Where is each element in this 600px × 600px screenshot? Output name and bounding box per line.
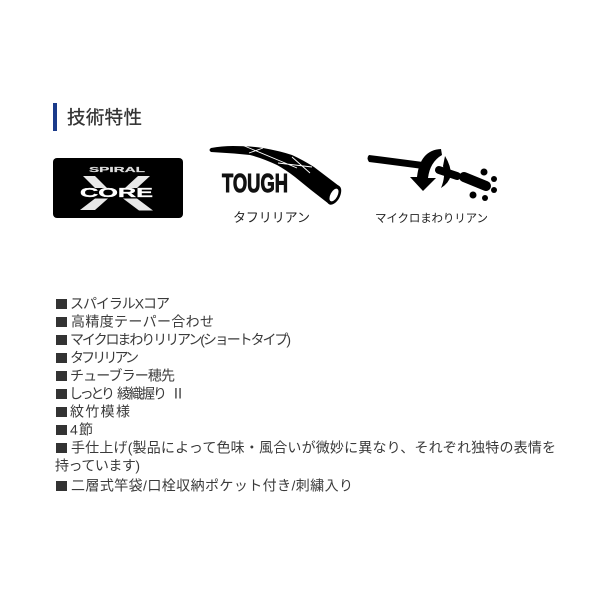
feature list: タフリリアン <box>70 350 139 366</box>
icon: micro-guide lillian <box>368 149 497 201</box>
heading: 技術特性: 技術特性 <box>67 107 142 128</box>
icon: Tough Lillian tube <box>210 145 344 207</box>
feature list: 手仕上げ(製品によって色味・風合いが微妙に異なり、それぞれ独特の表情を <box>71 440 556 456</box>
feature list: 二層式竿袋/口栓収納ポケット付き/刺繍入り <box>71 478 353 494</box>
icon: Spiral X Core badge <box>53 158 183 218</box>
heading: 技術特性 <box>53 103 142 131</box>
icon: Tough Lillian tube: TOUGH <box>222 168 288 198</box>
feature list: 高精度テーパー合わせ <box>71 314 214 330</box>
feature list: Ⅱ <box>171 386 185 402</box>
icon: Spiral X Core badge: CORE <box>80 186 153 200</box>
feature list: 綾織握り <box>117 386 167 402</box>
icon: Spiral X Core badge: SPIRAL <box>89 167 147 174</box>
feature list <box>55 296 556 494</box>
feature list: 持っています) <box>55 458 140 474</box>
feature list: マイクロまわりリリアン(ショートタイプ) <box>70 332 291 348</box>
label: タフリリアン: タフリリアン <box>233 210 310 225</box>
feature list: 4節 <box>70 422 93 438</box>
feature list: スパイラルXコア <box>70 296 170 312</box>
feature list: しっとり <box>69 386 115 402</box>
feature list: チューブラー穂先 <box>70 368 175 384</box>
feature list: 紋竹模様 <box>70 404 130 420</box>
label: マイクロまわりリアン: マイクロまわりリアン <box>375 212 488 225</box>
